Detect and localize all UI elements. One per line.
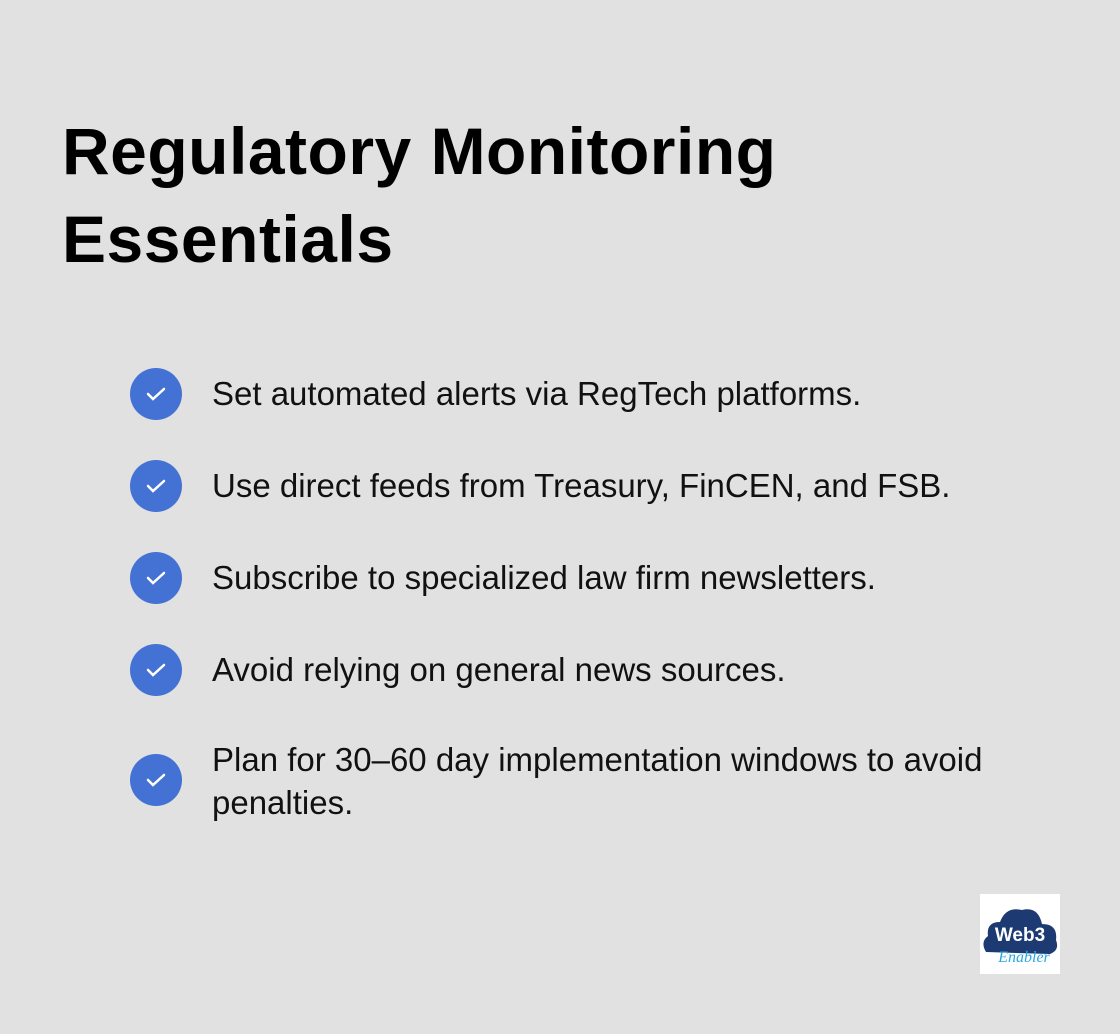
item 1: Set automated alerts via RegTech platforms.: [212, 375, 861, 412]
item 1: [130, 368, 861, 420]
item 3: [130, 552, 876, 604]
logo: [980, 894, 1060, 974]
logo: Enabler: [997, 949, 1051, 966]
item 2: Use direct feeds from Treasury, FinCEN, and FSB.: [212, 467, 950, 504]
title: Essentials: [62, 202, 394, 276]
title: [62, 114, 776, 276]
title: Regulatory Monitoring: [62, 114, 776, 188]
logo: Web3: [995, 925, 1045, 946]
item 4: Avoid relying on general news sources.: [212, 651, 786, 688]
item 5: Plan for 30–60 day implementation windows to avoid penalties.: [212, 741, 982, 821]
item 2: [130, 460, 950, 512]
item 4: [130, 644, 786, 696]
item 3: Subscribe to specialized law firm newsletters.: [212, 559, 876, 596]
